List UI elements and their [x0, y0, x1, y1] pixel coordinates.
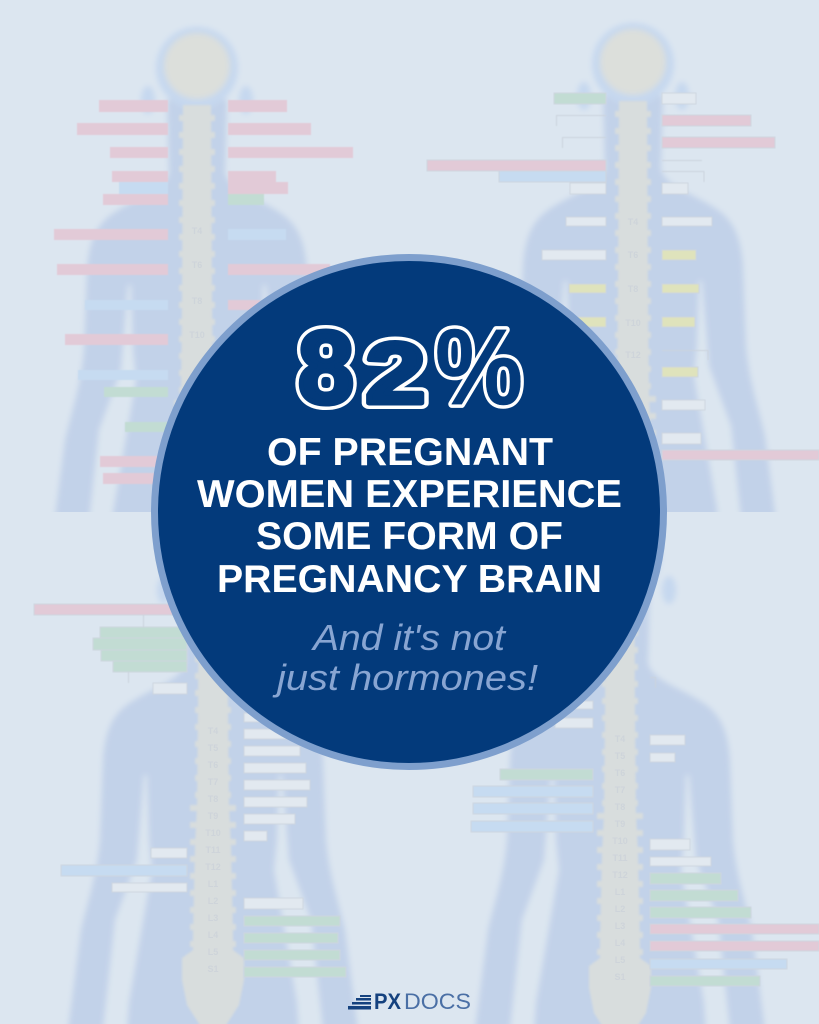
figure: top-right body with spine and bar chart	[426, 22, 819, 512]
spine labels: L4	[208, 930, 218, 940]
spine labels: T8	[628, 284, 638, 294]
nerve bars	[34, 604, 346, 977]
nerve bars	[471, 678, 819, 986]
spine labels: L5	[615, 955, 625, 965]
spine labels: L1	[615, 887, 625, 897]
figure: bottom-right body with spine and bar chart	[470, 576, 819, 1024]
spine labels: T5	[615, 751, 625, 761]
heading: OF PREGNANT	[267, 431, 553, 474]
logo: PX Docs: DOCS	[404, 989, 471, 1014]
big statistic: 82% outlined: 8	[298, 310, 354, 425]
heading: PREGNANCY BRAIN	[217, 558, 602, 601]
spine labels: T12	[625, 350, 641, 360]
spine labels: T12	[612, 870, 628, 880]
spine labels: L2	[208, 896, 218, 906]
figure: bottom-left body with spine and bar chart	[34, 579, 358, 1024]
spine labels: T4	[192, 226, 202, 236]
subheading	[271, 617, 538, 698]
big statistic: 82% outlined: 8	[298, 310, 354, 425]
heading: WOMEN EXPERIENCE	[197, 473, 622, 516]
subheading: And it's not	[311, 617, 507, 658]
spine labels: T8	[208, 794, 218, 804]
big statistic: 82% outlined: %	[435, 306, 523, 427]
spine labels: T6	[628, 250, 638, 260]
spine labels: T8	[615, 802, 625, 812]
nerve bars	[54, 100, 353, 484]
body silhouette	[474, 576, 766, 1024]
wordmark: PX	[374, 989, 401, 1014]
spine labels: T8	[192, 296, 202, 306]
body silhouette	[54, 26, 308, 512]
spine labels: T11	[612, 853, 628, 863]
spine labels: T9	[615, 819, 625, 829]
heading	[197, 431, 622, 601]
spine labels: S1	[614, 972, 626, 982]
spine labels: T10	[625, 318, 641, 328]
spine labels: T10	[189, 330, 205, 340]
spine	[588, 632, 652, 1024]
subheading: just hormones!	[271, 657, 538, 698]
spine labels: T5	[208, 743, 218, 753]
circle ring and fill	[154, 258, 664, 766]
body silhouette	[68, 579, 358, 1024]
big statistic: 82% outlined: 2	[366, 326, 426, 422]
spine labels	[612, 734, 628, 982]
big statistic: 82% outlined	[298, 306, 523, 427]
figure: top-left body with spine and bar chart	[54, 26, 354, 512]
heading: SOME FORM OF	[256, 515, 563, 558]
spine labels: L3	[615, 921, 625, 931]
spine labels: T6	[208, 760, 218, 770]
spine labels: L3	[208, 913, 218, 923]
spine labels: T4	[208, 726, 218, 736]
spine	[174, 105, 216, 404]
spine labels: T6	[615, 768, 625, 778]
big statistic: 82% outlined: 2	[366, 326, 426, 422]
spine labels: T11	[205, 845, 221, 855]
spine labels	[625, 217, 641, 360]
spine	[182, 657, 244, 1024]
spine labels: L1	[208, 879, 218, 889]
spine labels	[205, 726, 221, 974]
spine labels: T6	[192, 260, 202, 270]
spine labels: T4	[615, 734, 625, 744]
logo: PX Docs	[348, 989, 471, 1014]
nerve bars	[427, 93, 819, 460]
spine labels: T10	[205, 828, 221, 838]
spine labels: T12	[205, 862, 221, 872]
spine labels: T10	[612, 836, 628, 846]
spine labels: L2	[615, 904, 625, 914]
spine labels	[189, 226, 205, 340]
spine labels: S1	[207, 964, 219, 974]
spine labels: T4	[628, 217, 638, 227]
panel: central circle callout	[154, 258, 664, 766]
spine labels: L4	[615, 938, 625, 948]
spine labels: T7	[615, 785, 625, 795]
spine labels: L5	[208, 947, 218, 957]
big statistic: 82% outlined: %	[435, 306, 523, 427]
icon: stacked steps	[348, 995, 371, 1010]
body silhouette	[521, 22, 776, 512]
spine labels: T9	[208, 811, 218, 821]
spine labels: T7	[208, 777, 218, 787]
spine	[614, 101, 656, 436]
